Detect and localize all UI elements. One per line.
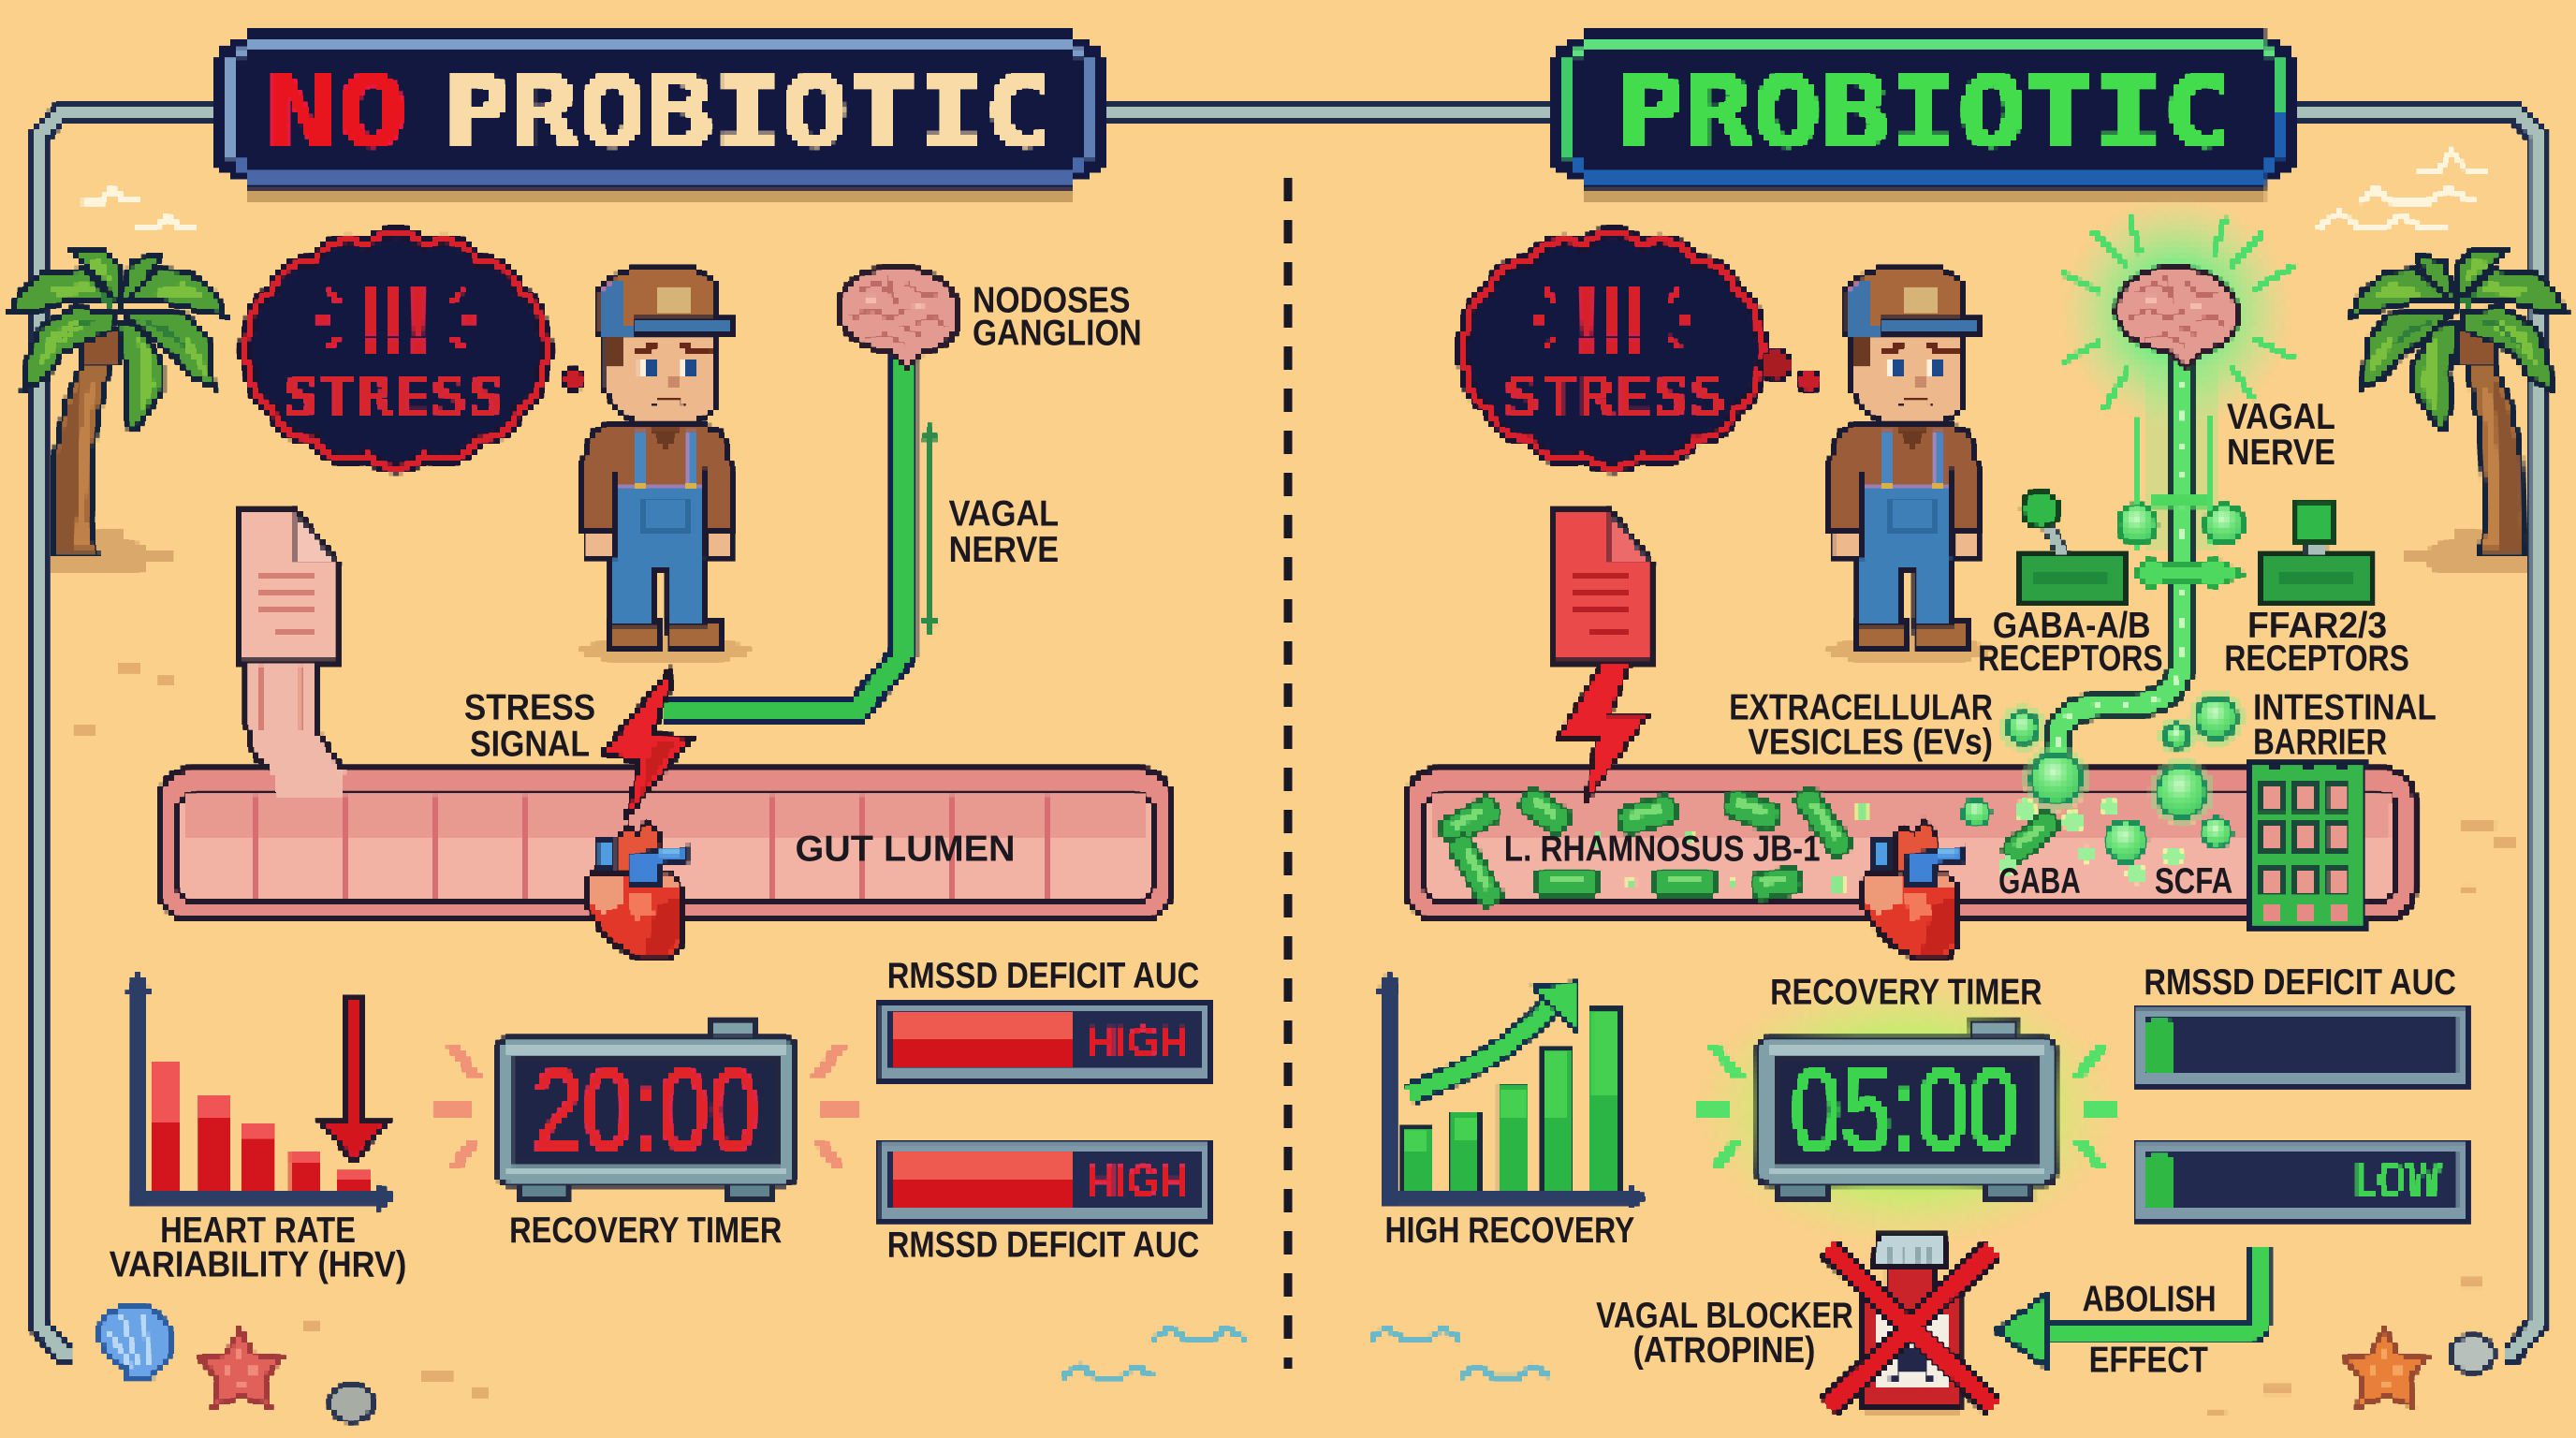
label: scfa: SCFA [2155,861,2232,902]
brain glow and rays [2062,198,2293,550]
label: gaba receptors: RECEPTORS [1978,638,2163,679]
label: heart rate variability: VARIABILITY (HRV) [110,1245,406,1285]
panel: probiotic artwork [1370,26,2565,1416]
title banner: probiotic [1552,26,2298,202]
stress thought bubble [245,232,584,467]
label: nodoses ganglion [973,280,1142,354]
rmssd bar high, top [875,999,1211,1083]
sand specks [2206,822,2515,1416]
shore wave marks [1370,1328,1551,1377]
vagal nerve, green [666,353,903,710]
abolish effect arrow [1997,1249,2260,1369]
label: ffar receptors [2224,606,2409,679]
stress document with tube into gut [238,511,345,799]
stress thought bubble [1461,232,1820,467]
icon: pebble [2452,1336,2494,1372]
label: nodoses ganglion: GANGLION [973,314,1142,354]
stress thought bubble: !!! [1574,266,1647,375]
label: extracellular vesicles [1729,688,1993,763]
panel: probiotic labels [1385,397,2456,1381]
icon: heart [587,820,687,960]
panel: no probiotic artwork [11,26,1245,1421]
icon: heart [1863,820,1963,960]
label: stress signal: STRESS [464,688,595,728]
label: gaba receptors [1978,606,2163,679]
title banner: no probiotic: NO [266,54,407,169]
label: gaba receptors: GABA-A/B [1993,606,2150,646]
icon: ffar receptor lever [2261,501,2371,601]
panel: no probiotic labels [110,280,1199,1285]
sand specks [76,662,488,1397]
icon: starfish [2345,1329,2425,1406]
label: nodoses ganglion: NODOSES [973,280,1131,320]
barrier mesh [2249,762,2364,927]
label: vagal nerve: NERVE [2227,433,2335,473]
icon: pebble [330,1386,373,1421]
stress thought bubble: !!! [359,266,431,375]
label: extracellular vesicles: EXTRACELLULAR [1729,688,1993,728]
label: intestinal barrier: INTESTINAL [2253,688,2437,728]
title banner: no probiotic: PROBIOTIC [444,54,1051,169]
farmer character [1827,269,1991,664]
label: intestinal barrier [2253,688,2437,763]
rmssd bar low, bottom: LOW [2354,1153,2441,1207]
label: vagal nerve: NERVE [949,530,1059,570]
icon: starfish [200,1329,281,1406]
label: vagal nerve [949,494,1059,570]
label: heart rate variability: HEART RATE [160,1211,356,1251]
label: ffar receptors: FFAR2/3 [2247,606,2387,646]
label: vagal blocker (atropine) [1596,1296,1853,1371]
icon: lightning bolt [1558,664,1647,805]
icon: palm tree [11,250,225,574]
label: stress signal: SIGNAL [470,724,590,764]
label: l. rhamnosus jb-1: L. RHAMNOSUS JB-1 [1504,829,1821,870]
label: rmssd deficit auc: RMSSD DEFICIT AUC [2144,962,2456,1003]
icon: brain nodose ganglion [838,268,959,368]
recovery timer 20:00 [435,1022,857,1201]
vagal nerve, glowing [2056,353,2182,772]
vagal blocker bottle crossed out [1828,1235,1993,1415]
label: heart rate variability [110,1211,406,1285]
stress document, red [1553,511,1651,662]
recovery timer 05:00 [1697,976,2117,1245]
label: stress signal [464,688,595,764]
rmssd bar low, bottom [2132,1138,2469,1223]
label: rmssd deficit auc, bottom: RMSSD DEFICIT AUC [887,1225,1199,1266]
label: vagal nerve: VAGAL [2227,397,2335,437]
shore wave marks [1063,1328,1245,1377]
sea wave marks [82,189,198,228]
receptor junction on nerve [2118,496,2244,588]
rmssd bar high, bottom: HIGH [1089,1157,1187,1207]
rmssd bar high, bottom [875,1138,1211,1223]
label: vagal blocker (atropine): (ATROPINE) [1633,1330,1815,1371]
gut tube with probiotics [1406,769,2415,920]
hrv declining bar chart [124,970,396,1211]
label: recovery timer: RECOVERY TIMER [1770,972,2042,1012]
recovery timer 20:00: 20:00 [533,1046,759,1176]
l. rhamnosus bacteria [1436,785,2063,910]
central dashed divider [1284,178,1292,1369]
extracellular vesicles and metabolites [1963,690,2244,884]
label: vagal blocker (atropine): VAGAL BLOCKER [1596,1296,1853,1336]
label: high recovery: HIGH RECOVERY [1385,1211,1635,1251]
high recovery bar chart [1375,970,1647,1211]
rmssd bar empty, top [2132,1004,2469,1088]
label: intestinal barrier: BARRIER [2253,723,2387,763]
icon: brain glowing [2116,268,2237,368]
label: rmssd deficit auc, top: RMSSD DEFICIT AUC [887,956,1199,996]
title banner: probiotic: PROBIOTIC [1617,54,2231,169]
length arrow beside vagal nerve [922,424,938,634]
icon: palm tree [2351,250,2565,574]
label: vagal nerve [2227,397,2335,473]
recovery timer 05:00: 05:00 [1791,1046,2019,1176]
label: gut lumen: GUT LUMEN [795,829,1016,870]
sea wave marks [2318,153,2487,228]
gut tube [159,769,1171,920]
icon: shell [98,1305,172,1377]
label: ffar receptors: RECEPTORS [2224,638,2409,679]
icon: gaba receptor lever [2019,492,2124,601]
stress thought bubble: STRESS [283,367,505,428]
label: abolish: ABOLISH [2083,1280,2217,1320]
label: effect: EFFECT [2089,1341,2208,1381]
label: gaba: GABA [1998,861,2081,902]
label: vagal nerve: VAGAL [949,494,1059,535]
label: recovery timer: RECOVERY TIMER [509,1211,783,1251]
farmer character [580,269,751,664]
icon: lightning bolt [603,672,692,818]
label: extracellular vesicles: VESICLES (EVs) [1748,723,1993,763]
stress thought bubble: STRESS [1503,367,1727,428]
title banner: no probiotic [214,26,1105,202]
rmssd bar high, top: HIGH [1089,1018,1187,1067]
